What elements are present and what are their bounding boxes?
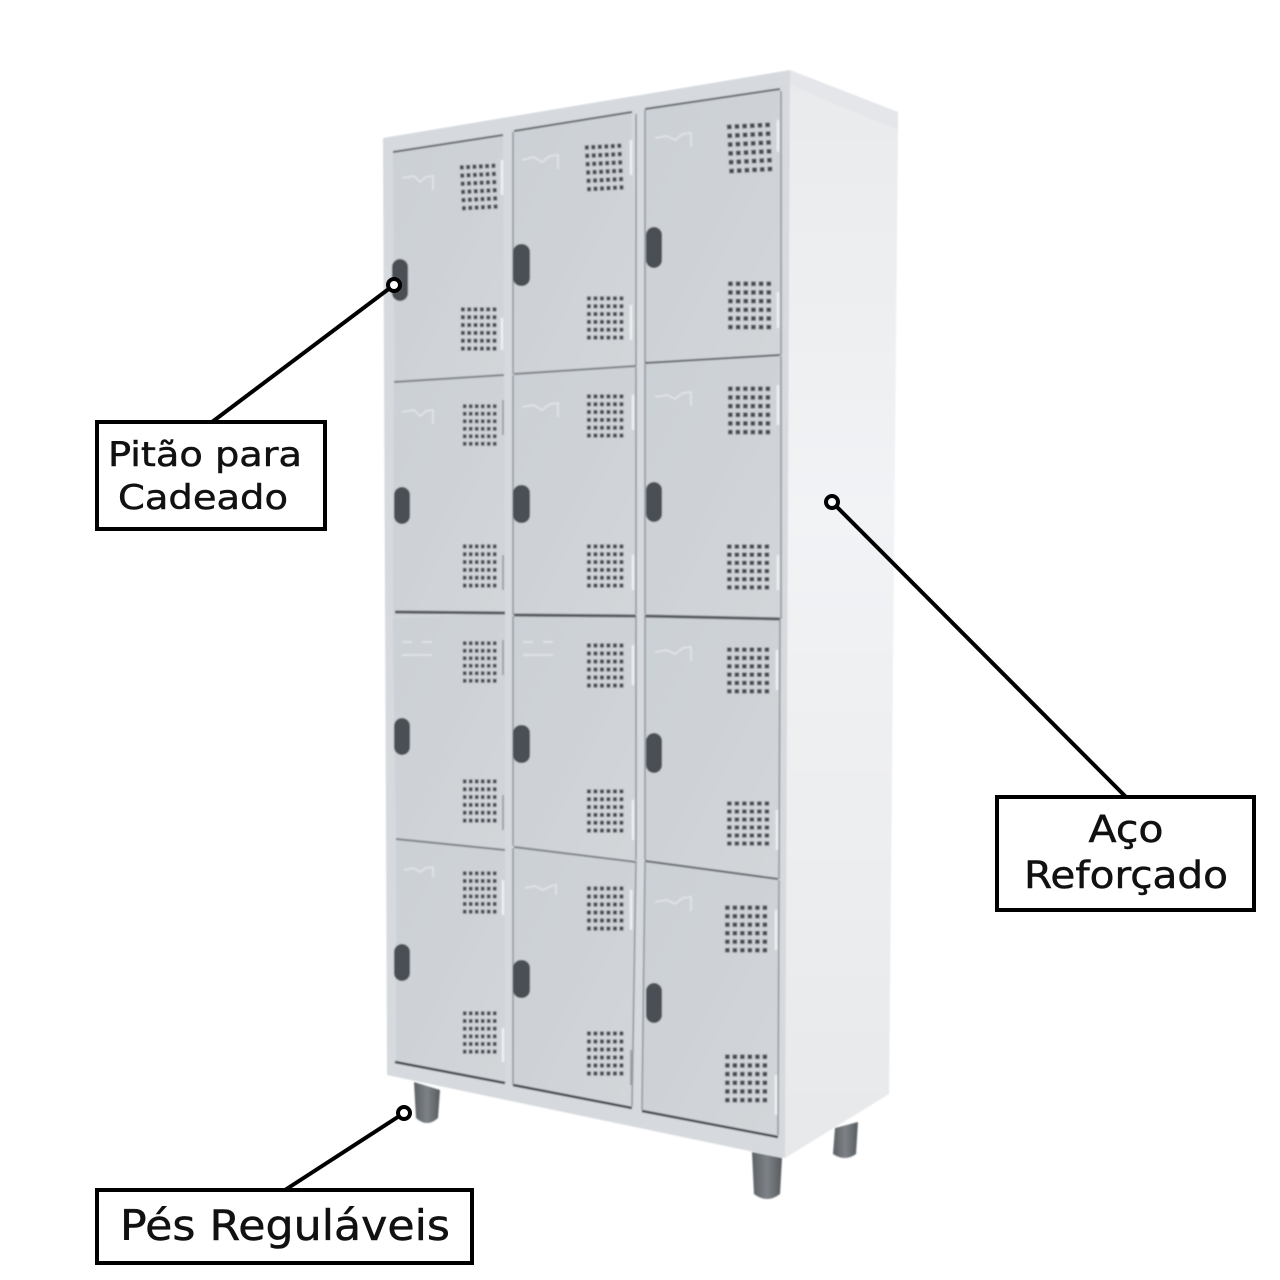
cabinet front frame bbox=[383, 70, 790, 1158]
cabinet top edge bbox=[790, 70, 898, 130]
door row 2 column 2 bbox=[513, 366, 636, 615]
door row 1 column 3 bbox=[645, 89, 781, 363]
callout: Pés Reguláveis: Pés Reguláveis bbox=[120, 1201, 450, 1250]
callout: Pitão para Cadeado: Pitão para bbox=[108, 435, 302, 475]
callout: Pitão para Cadeado: Cadeado bbox=[118, 478, 288, 518]
callout: Aço Reforçado: Reforçado bbox=[1024, 854, 1228, 897]
callout: Pés Reguláveis bbox=[97, 1107, 472, 1263]
cabinet side panel bbox=[785, 84, 898, 1158]
callout: Pitão para Cadeado bbox=[97, 279, 400, 529]
locker cabinet bbox=[383, 70, 898, 1199]
door row 2 column 1 bbox=[393, 375, 505, 617]
door row 3 column 1 bbox=[393, 612, 505, 850]
door row 3 column 3 bbox=[645, 615, 780, 879]
door row 3 column 2 bbox=[513, 615, 636, 860]
door row 4 column 1 bbox=[394, 839, 505, 1083]
callout: Aço Reforçado: Aço bbox=[1088, 808, 1164, 851]
door row 1 column 2 bbox=[513, 112, 636, 374]
door row 1 column 1 bbox=[392, 135, 504, 382]
callout: Aço Reforçado bbox=[826, 496, 1254, 910]
adjustable feet bbox=[414, 1082, 858, 1199]
door row 4 column 3 bbox=[642, 861, 779, 1137]
door row 4 column 2 bbox=[513, 847, 636, 1108]
door row 2 column 3 bbox=[645, 355, 781, 619]
